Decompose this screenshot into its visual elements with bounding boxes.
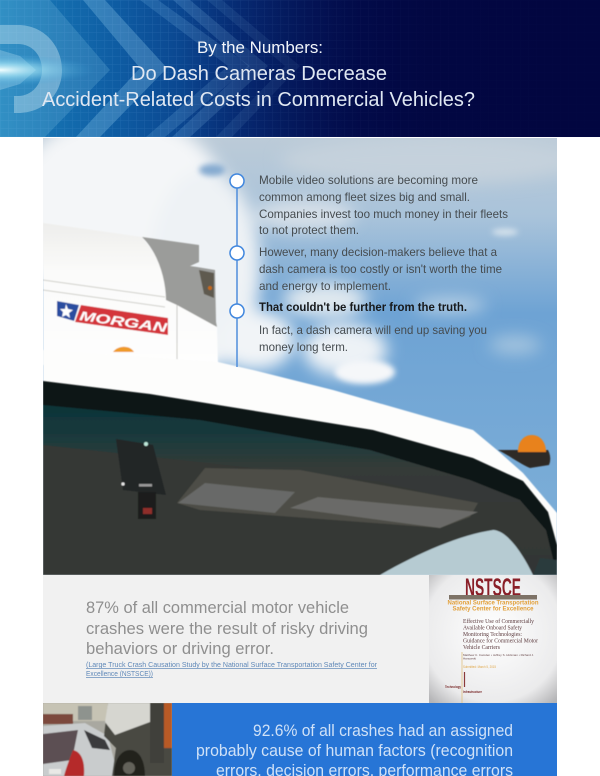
sun visor — [177, 468, 478, 528]
intro text: That couldn't be further from the truth. — [259, 301, 467, 314]
intro text: Companies invest too much money in their fleets — [259, 208, 508, 221]
truck — [104, 722, 172, 776]
source link — [86, 662, 378, 678]
silver car — [43, 723, 118, 776]
intro text: In fact, a dash camera will end up saving you — [259, 324, 487, 337]
header banner — [0, 0, 600, 137]
cover diagram — [445, 652, 482, 703]
intro text: and energy to implement. — [259, 280, 391, 293]
subtitle: By the Numbers: — [197, 39, 323, 57]
authors and date: Hanowski — [463, 656, 476, 660]
timeline — [230, 174, 244, 367]
window opening — [380, 530, 533, 575]
statistic text: 92.6% of all crashes had an assigned — [253, 722, 513, 740]
Morgan logo — [57, 301, 169, 335]
title line 1: Do Dash Cameras Decrease — [131, 62, 387, 85]
amber beacon — [498, 435, 550, 468]
statistic text — [196, 722, 513, 776]
report cover — [429, 574, 557, 703]
truck box — [43, 223, 218, 365]
truck roof — [43, 350, 557, 575]
authors and date: Submitted: March 5, 2015 — [463, 665, 496, 669]
organisation name — [447, 600, 539, 612]
report title: Available Onboard Safety — [463, 624, 522, 632]
report title — [463, 618, 538, 651]
panel: NSTSCE statistic — [43, 575, 429, 703]
report title: Effective Use of Commercially — [463, 618, 534, 625]
organisation name: Safety Center for Excellence — [452, 606, 534, 612]
title line 2: Accident-Related Costs in Commercial Vehicles? — [42, 88, 475, 111]
Morgan logo: MORGAN — [79, 308, 169, 335]
report title: Guidance for Commercial Motor — [463, 638, 538, 644]
authors and date — [463, 653, 534, 669]
organisation name: National Surface Transportation — [447, 600, 539, 606]
statistic text — [86, 599, 368, 658]
intro text: money long term. — [259, 341, 348, 354]
timeline node 1 — [230, 174, 244, 188]
panel: truck photo — [43, 138, 557, 575]
authors and date: Matthew C. Camden • Jeffrey S. Hickman • Richard J. — [463, 653, 534, 657]
timeline node 2 — [230, 246, 244, 260]
intro text: However, many decision-makers believe that a — [259, 246, 498, 259]
intro text: to not protect them. — [259, 224, 359, 237]
windshield — [43, 381, 557, 575]
statistic text: 87% of all commercial motor vehicle — [86, 599, 349, 617]
dash camera — [116, 439, 166, 519]
intro text: Mobile video solutions are becoming more — [259, 174, 478, 187]
intro text: dash camera is too costly or isn't worth the time — [259, 263, 502, 276]
chevron arrows — [0, 0, 510, 137]
logo watermark — [0, 25, 62, 113]
report title: Vehicle Carriers — [463, 645, 501, 651]
intro text: common among fleet sizes big and small. — [259, 191, 470, 204]
source link: (Large Truck Crash Causation Study by the National Surface Transportation Safety Center for — [86, 662, 378, 669]
panel: human factors statistic — [172, 703, 557, 776]
statistic text: behaviors or driving error. — [86, 640, 274, 658]
crash photo — [43, 703, 172, 776]
intro text — [259, 174, 508, 354]
report title: Monitoring Technologies: — [463, 632, 522, 638]
timeline node 3 — [230, 304, 244, 318]
source link: Excellence (NSTSCE)) — [86, 671, 153, 678]
statistic text: probably cause of human factors (recognition — [196, 742, 513, 760]
cover diagram: Infrastructure — [463, 690, 482, 694]
cover diagram: Technology — [445, 685, 461, 689]
sky with clouds — [43, 138, 557, 575]
NSTSCE logo: NSTSCE — [465, 574, 521, 602]
statistic text: crashes were the result of risky driving — [86, 620, 368, 638]
